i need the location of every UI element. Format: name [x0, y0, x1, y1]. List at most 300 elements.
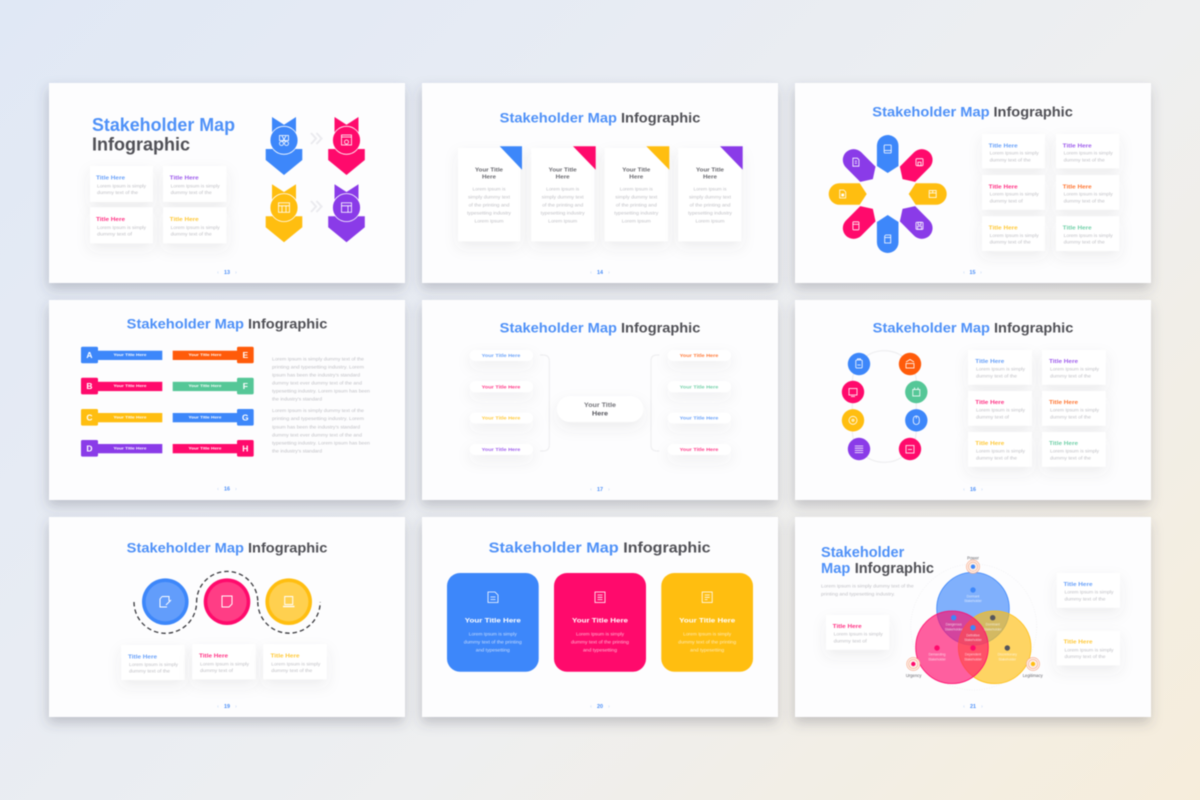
petal: left yellow — [829, 183, 867, 205]
card: yellow: dummy text of the printing — [678, 639, 737, 644]
card: yellow title: Lorem Ipsum is simply — [976, 449, 1026, 454]
title: Stakeholder Map — [872, 104, 990, 119]
region: definitive: Stakeholder — [964, 638, 983, 642]
circle: yellow — [265, 578, 312, 625]
card: pink title: Lorem Ipsum is simply — [990, 192, 1040, 197]
intro text: printing and typesetting industry. — [821, 591, 895, 596]
ribbon: yellow — [266, 184, 302, 242]
title: Stakeholder Map — [500, 110, 617, 126]
card: purple title — [1056, 134, 1119, 168]
title — [873, 320, 1074, 335]
pill: right orange — [668, 350, 731, 361]
slide 16: lettered bars — [49, 300, 405, 500]
ribbon: purple — [328, 184, 365, 242]
card: yellow title: Title Here — [989, 226, 1018, 232]
card: yellow title: Lorem Ipsum is simply — [171, 225, 221, 230]
title: Stakeholder Map — [489, 539, 619, 556]
petal: top blue — [877, 135, 898, 173]
title — [127, 317, 328, 332]
card: purple title: Title Here — [1049, 359, 1078, 365]
card: yellow title: dummy text of the — [976, 455, 1018, 460]
marker: urgency: Urgency — [906, 673, 922, 678]
region: discretionary — [998, 645, 1017, 661]
card: pink title: Title Here — [833, 624, 862, 630]
region: discretionary: Stakeholder — [998, 657, 1017, 661]
circle: yellow disc — [842, 409, 864, 432]
region: dangerous: Stakeholder — [945, 627, 963, 631]
card: orange title: dummy text of the — [1050, 414, 1092, 419]
ring — [852, 351, 916, 462]
card: yellow title — [1057, 631, 1120, 665]
page number: 13 — [224, 270, 230, 276]
pill: right orange: Your Title Here — [680, 353, 719, 358]
arrow: top chevrons — [311, 133, 322, 144]
slide 15: petal flower — [795, 83, 1151, 283]
card 4: Your Title — [696, 167, 724, 173]
card: purple title: Lorem Ipsum is simply — [171, 184, 221, 188]
page number: › — [235, 704, 237, 710]
card: yellow title — [982, 216, 1045, 251]
pill: right green: Your Title Here — [680, 384, 719, 389]
card: purple title: Lorem Ipsum is simply — [1050, 367, 1100, 372]
card: blue title: dummy text of the — [976, 373, 1018, 378]
region: dangerous — [945, 615, 963, 631]
bar C — [81, 409, 162, 426]
bar F — [173, 378, 254, 394]
card 1: typesetting industry — [467, 211, 512, 216]
card: blue title: Lorem Ipsum is simply — [976, 367, 1026, 372]
card: yellow title: Title Here — [170, 217, 199, 223]
page number — [217, 270, 237, 276]
card 4: of the printing and — [690, 203, 731, 208]
page number — [963, 704, 983, 710]
card: purple title: dummy text of the — [1050, 373, 1092, 378]
card: green title: Lorem Ipsum is simply — [1064, 233, 1114, 238]
card: yellow title: Lorem Ipsum is simply — [990, 233, 1040, 238]
page number: ‹ — [590, 487, 592, 493]
title: Stakeholder Map — [127, 541, 244, 556]
page number: 17 — [597, 487, 603, 493]
pill: right pink — [668, 444, 731, 455]
card: purple title — [163, 166, 226, 202]
card 4: Lorem Ipsum — [696, 219, 725, 224]
card: purple title: dummy text of the — [1064, 157, 1105, 162]
paragraph 1: Ipsum has been the industry's standard — [272, 372, 361, 377]
region: definitive: Definitive — [966, 633, 980, 637]
region: demanding: Stakeholder — [928, 657, 947, 661]
paragraph 1 — [272, 356, 371, 401]
circle: blue mouse — [905, 409, 928, 432]
marker: legitimacy: Legitimacy — [1023, 673, 1044, 678]
card: pink title: dummy text of — [990, 198, 1024, 203]
card 4: Here — [703, 175, 717, 181]
bar H — [173, 440, 254, 457]
card: pink title: Title Here — [989, 184, 1018, 190]
pill: left blue: Your Title Here — [482, 353, 521, 358]
bar E — [173, 347, 254, 363]
slide 21: venn diagram — [795, 517, 1151, 717]
bar H: Your Title Here — [188, 446, 222, 450]
card: green title: Lorem Ipsum is simply — [1050, 449, 1100, 454]
card 4: typesetting industry — [688, 211, 733, 216]
pill: left purple: Your Title Here — [482, 447, 521, 452]
card: green title — [1042, 432, 1106, 467]
card 1: of the printing and — [468, 203, 510, 208]
paragraph 1: the industry's standard — [272, 396, 323, 401]
page number: ‹ — [590, 704, 592, 710]
card: pink: and typesetting — [583, 647, 618, 652]
bar A: Your Title Here — [114, 353, 146, 357]
card 3 — [605, 146, 669, 241]
title: Map — [821, 560, 850, 577]
card 3: typesetting industry — [614, 211, 659, 216]
title: Infographic — [994, 320, 1074, 335]
card 1: Here — [482, 175, 496, 181]
card: yellow title — [968, 432, 1032, 467]
bar B — [81, 378, 162, 394]
slide 13: ribbon badges — [49, 83, 405, 283]
pill: right blue: Your Title Here — [680, 416, 719, 420]
card: yellow title: dummy text of the — [990, 240, 1031, 244]
page number: 21 — [970, 704, 976, 710]
page number: ‹ — [590, 270, 592, 276]
card: pink title: dummy text of — [97, 231, 133, 236]
page number: ‹ — [963, 270, 965, 276]
paragraph 2: typesetting industry. Lorem Ipsum has been — [272, 440, 371, 445]
bracket: right — [651, 355, 659, 451]
card: blue title — [1057, 573, 1120, 608]
card: pink: Your Title Here — [572, 617, 628, 624]
page number — [590, 487, 610, 493]
card: pink title — [192, 644, 256, 679]
petal: top left purple — [838, 145, 880, 187]
slide 18: ring of circles — [795, 300, 1151, 500]
region: dependent: Stakeholder — [964, 657, 983, 661]
pill: left purple — [470, 444, 533, 455]
page number: ‹ — [217, 704, 219, 710]
card: purple title: dummy text of the — [171, 190, 212, 195]
card 3: Lorem Ipsum is — [620, 187, 654, 192]
card 4: Lorem Ipsum is — [694, 187, 727, 192]
bar H: H — [242, 443, 248, 453]
page number: › — [235, 270, 237, 276]
card: orange title: Lorem Ipsum is simply — [1064, 192, 1114, 197]
centre pill: Your Title — [584, 402, 617, 409]
region: dormant: Dormant — [967, 595, 979, 599]
bracket: left — [540, 355, 549, 451]
card: purple title: Lorem Ipsum is simply — [1064, 151, 1114, 156]
bar C: C — [86, 412, 93, 422]
title: Infographic — [248, 317, 328, 332]
title: Infographic — [994, 104, 1073, 119]
card: blue title — [121, 645, 185, 680]
title: Infographic — [248, 541, 328, 556]
region: dangerous: Dangerous — [946, 623, 962, 627]
bar D: D — [86, 443, 93, 453]
card: pink title — [90, 207, 153, 243]
card: yellow title — [263, 644, 327, 679]
card: green title: Title Here — [1049, 441, 1078, 447]
card: purple title: Title Here — [1063, 143, 1092, 149]
card: yellow title: Title Here — [975, 441, 1004, 447]
pill: left yellow: Your Title Here — [482, 416, 521, 420]
card: pink title: Title Here — [199, 654, 228, 660]
title: Stakeholder Map — [92, 115, 235, 135]
circle: purple keyboard — [848, 438, 870, 460]
card: blue title: Title Here — [1064, 582, 1093, 588]
bar F: Your Title Here — [188, 384, 222, 388]
card 2 — [531, 146, 596, 241]
bar D — [81, 440, 162, 457]
card: pink title: Lorem Ipsum is simply — [976, 408, 1026, 413]
card: blue title — [968, 350, 1032, 385]
paragraph 2: Ipsum has been the industry's standard — [272, 424, 361, 429]
dashed arcs — [134, 571, 320, 633]
card: yellow title: Title Here — [270, 654, 300, 660]
card: pink title — [982, 175, 1045, 210]
pill: right pink: Your Title Here — [680, 447, 719, 452]
title: Infographic — [621, 110, 701, 126]
card: yellow title: Lorem Ipsum is simply — [1064, 647, 1114, 652]
card: pink: dummy text of the printing — [571, 639, 630, 644]
marker: power: Power — [967, 555, 980, 560]
region: dependent — [964, 645, 983, 661]
card: blue title: Title Here — [128, 654, 157, 660]
region: dominant — [984, 615, 1002, 631]
card: blue title: Lorem Ipsum is simply — [990, 151, 1040, 156]
card: blue title: Lorem Ipsum is simply — [97, 184, 147, 188]
page number — [590, 270, 610, 276]
venn dotted ring — [911, 564, 1037, 690]
bar B: B — [86, 381, 93, 391]
card: yellow title: dummy text of the — [271, 668, 313, 673]
card: yellow title: Lorem Ipsum is simply — [271, 662, 321, 666]
centre pill — [557, 396, 643, 422]
card: green title: Title Here — [1063, 226, 1092, 232]
region: demanding — [928, 645, 947, 661]
page number: 16 — [224, 486, 230, 492]
card: pink title: dummy text of — [976, 414, 1010, 419]
card 2: of the printing and — [542, 203, 584, 208]
card: pink — [554, 573, 646, 672]
card: yellow: and typesetting — [690, 647, 725, 652]
card: blue title: dummy text of the — [129, 668, 171, 674]
pill: left pink — [470, 381, 533, 392]
page number — [590, 704, 610, 710]
paragraph 2: printing and typesetting industry. Lorem — [272, 416, 364, 421]
card 3: Here — [629, 175, 644, 181]
title — [500, 110, 701, 126]
page number: 19 — [224, 704, 230, 710]
card 2: Lorem Ipsum — [548, 219, 577, 224]
bar E: Your Title Here — [188, 353, 222, 357]
card: purple title — [1042, 350, 1106, 385]
card: purple title: Title Here — [170, 176, 199, 182]
slide 19: three circles with dashed arcs — [49, 517, 405, 717]
circle: green bag — [905, 381, 928, 403]
title — [489, 539, 711, 556]
card: pink title — [826, 615, 889, 650]
card 4 — [678, 146, 743, 241]
marker: power — [966, 555, 980, 573]
card: orange title: Title Here — [1049, 400, 1078, 406]
card 4: simply dummy text — [689, 194, 732, 200]
title — [821, 544, 934, 577]
card: orange title: dummy text of the — [1064, 198, 1105, 203]
card 3: Lorem Ipsum — [622, 219, 651, 224]
card: pink title: Title Here — [96, 217, 125, 223]
card: blue: Lorem Ipsum is simply — [469, 632, 518, 637]
page number: 14 — [597, 270, 603, 276]
card: blue: and typesetting — [476, 647, 510, 652]
card: pink title: dummy text of — [834, 638, 868, 643]
card: blue title: Title Here — [989, 143, 1018, 149]
title — [92, 115, 235, 154]
slide 17: central hub with pills — [422, 300, 778, 500]
card 2: simply dummy text — [542, 194, 585, 200]
title: Stakeholder Map — [500, 320, 617, 335]
region: discretionary: Discretionary — [998, 653, 1017, 657]
card: pink title: dummy text of — [200, 668, 234, 673]
pill: left blue — [470, 350, 533, 361]
paragraph 2: Lorem Ipsum is simply dummy text of the — [272, 408, 365, 413]
paragraph 1: printing and typesetting industry. Lorem — [272, 364, 364, 369]
card: green title: dummy text of the — [1064, 240, 1105, 244]
card: blue title: Title Here — [975, 359, 1004, 365]
title: Infographic — [855, 560, 934, 577]
card 2: Lorem Ipsum is — [546, 187, 580, 192]
bar G — [173, 409, 254, 426]
arrow: bottom chevrons — [311, 201, 322, 212]
page number: 15 — [970, 270, 976, 276]
page number: › — [608, 704, 610, 710]
page number: › — [980, 270, 982, 276]
page number — [963, 487, 983, 493]
card: orange title: Title Here — [1063, 184, 1092, 190]
card 2: Here — [556, 175, 570, 181]
paragraph 1: Lorem Ipsum is simply dummy text of the — [272, 356, 365, 361]
pill: left yellow — [470, 412, 533, 424]
region: dominant: Dominant — [986, 623, 1000, 627]
card: yellow — [661, 573, 753, 672]
card 1: Lorem Ipsum — [474, 219, 504, 224]
card: orange title — [1042, 391, 1106, 426]
page number: › — [608, 487, 610, 493]
venn circles — [916, 572, 1031, 684]
card: pink title: Title Here — [975, 400, 1004, 406]
petal: bottom blue — [877, 215, 898, 253]
card 1 — [458, 146, 522, 241]
region: dormant: Stakeholder — [964, 599, 983, 603]
petal: bottom left pink — [838, 201, 880, 243]
circle: pink monitor — [842, 381, 864, 403]
card 2: Your Title — [549, 167, 577, 173]
marker: urgency — [906, 657, 922, 678]
page number: ‹ — [217, 270, 219, 276]
card: orange title: Lorem Ipsum is simply — [1050, 408, 1100, 413]
paragraph 1: typesetting industry. Lorem Ipsum has been — [272, 388, 371, 393]
title: Infographic — [92, 134, 190, 154]
region: dormant — [964, 587, 983, 603]
bar F: F — [243, 381, 248, 391]
pill: right green — [668, 381, 731, 392]
circle: pink window — [899, 438, 921, 460]
card: pink title: Lorem Ipsum is simply — [834, 632, 884, 637]
card: orange title — [1056, 175, 1119, 210]
region: dominant: Stakeholder — [984, 627, 1002, 631]
circle: blue — [142, 578, 189, 625]
card: blue title: Lorem Ipsum is simply — [1064, 590, 1114, 595]
card: yellow title: Title Here — [1064, 640, 1093, 646]
page number: 16 — [970, 487, 976, 493]
title: Infographic — [621, 320, 701, 335]
region: definitive — [964, 625, 983, 642]
card: green title: dummy text of the — [1050, 455, 1092, 460]
paragraph 2 — [272, 408, 371, 453]
circle: orange box — [899, 353, 921, 375]
paragraph 2: the industry's standard — [272, 448, 323, 453]
slide 14: four folded cards — [422, 83, 778, 283]
region: demanding: Demanding — [929, 653, 946, 657]
paragraph 1: dummy text ever dummy text of the and — [272, 380, 363, 385]
marker: legitimacy — [1023, 657, 1044, 678]
page number: › — [981, 704, 983, 710]
card: pink title: Lorem Ipsum is simply — [97, 225, 147, 230]
card 1: Lorem Ipsum is — [472, 187, 506, 192]
card: blue title: dummy text of the — [990, 157, 1031, 162]
page number: ‹ — [217, 486, 219, 492]
card 1: Your Title — [475, 167, 503, 173]
ribbon: pink — [328, 117, 365, 175]
card: yellow: Lorem Ipsum is simply — [683, 632, 732, 637]
card 1: simply dummy text — [468, 194, 511, 200]
title: Stakeholder Map — [127, 317, 244, 332]
title — [872, 104, 1073, 119]
bar C: Your Title Here — [114, 415, 146, 419]
pill: left pink: Your Title Here — [482, 384, 521, 389]
region: dependent: Dependent — [965, 653, 981, 657]
card: yellow: Your Title Here — [679, 617, 736, 624]
circle: pink — [204, 578, 250, 625]
card: pink: Lorem Ipsum is simply — [576, 632, 625, 637]
page number: › — [981, 487, 983, 493]
bar A — [81, 347, 162, 363]
page number: 20 — [597, 704, 603, 710]
intro text — [821, 584, 914, 596]
page number — [963, 270, 982, 276]
slide 20: three solid cards — [422, 517, 778, 717]
card: yellow title: dummy text of the — [171, 231, 212, 236]
card 3: simply dummy text — [615, 194, 658, 200]
bar D: Your Title Here — [114, 446, 146, 450]
card: blue: dummy text of the printing — [464, 639, 522, 644]
page number: ‹ — [963, 487, 965, 493]
card: pink title — [968, 391, 1032, 426]
page number — [217, 704, 237, 710]
paragraph 2: dummy text ever dummy text of the and — [272, 432, 363, 437]
title: Stakeholder — [821, 544, 904, 561]
card: blue: Your Title Here — [465, 617, 521, 624]
card: pink title: Lorem Ipsum is simply — [200, 662, 250, 666]
circle: blue clipboard — [848, 353, 870, 375]
bar E: E — [242, 350, 248, 360]
card: blue — [447, 573, 539, 672]
title: Stakeholder Map — [873, 320, 990, 335]
page number: › — [235, 486, 237, 492]
card: blue title: Title Here — [96, 176, 125, 182]
page number: › — [608, 270, 610, 276]
centre pill: Here — [592, 410, 609, 417]
